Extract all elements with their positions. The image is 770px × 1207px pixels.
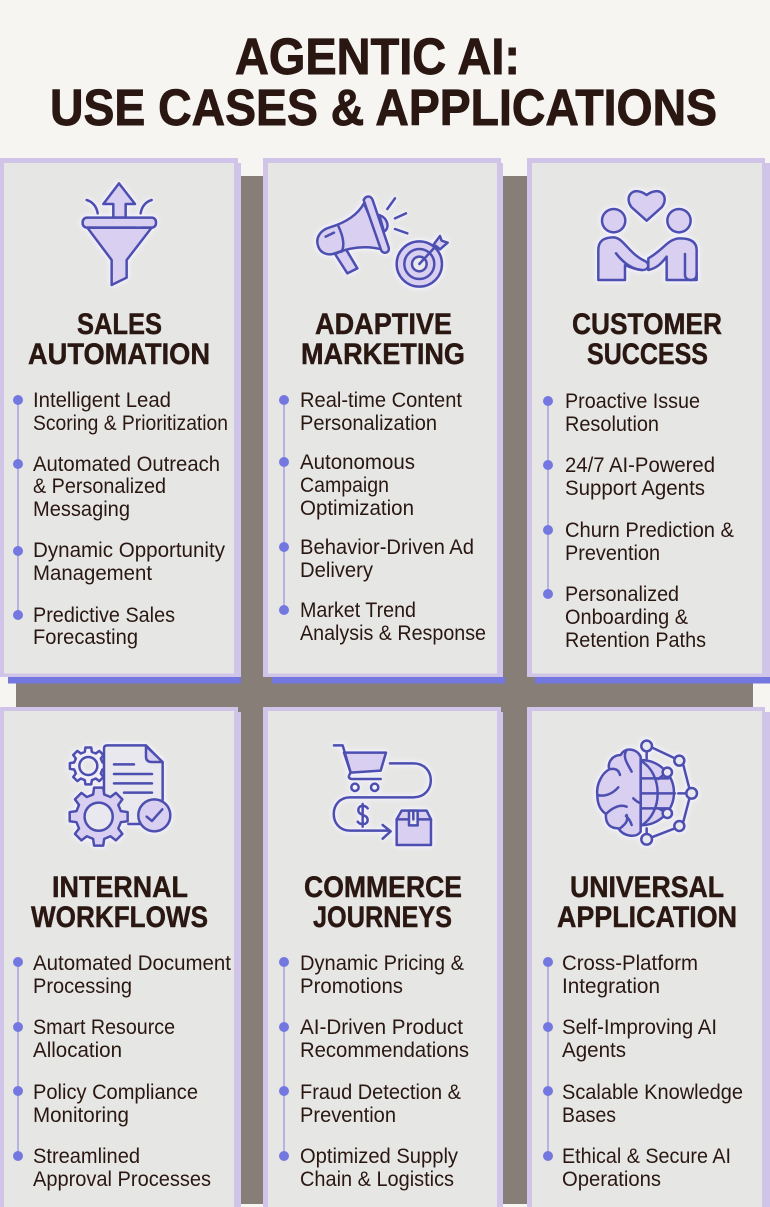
list: universal application items: Self-Improving AI [562,1016,717,1039]
list: internal workflows items: Automated Document [33,952,231,975]
list: sales automation items [13,389,228,649]
heading: universal application: APPLICATION [557,901,737,934]
panel: internal workflows [0,707,241,1207]
title [50,28,717,136]
heading: internal workflows [31,871,208,934]
list: sales automation items: & Personalized [33,475,166,498]
list: internal workflows items: Approval Processes [33,1168,211,1191]
heading: internal workflows: INTERNAL [52,871,188,904]
list: adaptive marketing items: Personalization [300,412,437,435]
heading: universal application: UNIVERSAL [570,871,724,904]
list: customer success items: Retention Paths [565,629,706,652]
panel: adaptive marketing [263,158,505,684]
icon: funnel with up arrow [83,183,156,285]
list: universal application items: Ethical & Secure AI [562,1145,731,1168]
list: commerce journeys items [279,952,469,1191]
icon: handshake with heart [598,191,697,280]
list: customer success items: Resolution [565,413,659,436]
list: sales automation items: Automated Outreach [33,453,220,476]
list: commerce journeys items: Recommendations [300,1039,469,1062]
heading: customer success: SUCCESS [587,338,708,371]
heading: internal workflows: WORKFLOWS [31,901,208,934]
list: commerce journeys items: Optimized Supply [300,1145,458,1168]
list: internal workflows items: Monitoring [33,1104,129,1127]
list: sales automation items: Scoring & Prioritization [33,412,228,435]
heading: customer success: CUSTOMER [572,308,722,341]
heading: adaptive marketing: MARKETING [301,338,465,371]
list: sales automation items: Forecasting [33,626,138,649]
list: adaptive marketing items [279,389,486,645]
list: universal application items [543,952,743,1191]
list: customer success items [543,390,734,652]
list: customer success items: Support Agents [565,477,705,500]
list: internal workflows items: Smart Resource [33,1016,175,1039]
list: adaptive marketing items: Optimization [300,497,414,520]
list: sales automation items: Predictive Sales [33,604,175,627]
list: universal application items: Cross-Platform [562,952,698,975]
list: customer success items: Proactive Issue [565,390,700,413]
list: universal application items: Bases [562,1104,616,1127]
heading: adaptive marketing [301,308,465,371]
list: commerce journeys items: Fraud Detection & [300,1081,461,1104]
list: commerce journeys items: Dynamic Pricing & [300,952,464,975]
heading: commerce journeys: COMMERCE [304,871,462,904]
list: adaptive marketing items: Autonomous [300,451,415,474]
list: adaptive marketing items: Campaign [300,474,389,497]
list: universal application items: Operations [562,1168,661,1191]
list: adaptive marketing items: Delivery [300,559,373,582]
heading: sales automation [28,308,210,371]
list: universal application items: Scalable Knowledge [562,1081,743,1104]
list: adaptive marketing items: Behavior-Driven Ad [300,536,474,559]
list: internal workflows items: Processing [33,975,132,998]
list: internal workflows items [13,952,231,1191]
list: adaptive marketing items: Real-time Content [300,389,462,412]
heading: commerce journeys: JOURNEYS [313,901,452,934]
heading: sales automation: AUTOMATION [28,338,210,371]
heading: commerce journeys [304,871,462,934]
list: sales automation items: Management [33,562,152,585]
panel: sales automation [0,158,241,684]
list: internal workflows items: Policy Compliance [33,1081,198,1104]
icon: megaphone and target [317,196,448,287]
list: customer success items: Prevention [565,542,660,565]
title: AGENTIC AI: [235,28,520,85]
heading: universal application [557,871,737,934]
list: sales automation items: Messaging [33,498,130,521]
heading: sales automation: SALES [77,308,162,341]
icon: cart, dollar and parcel journey [334,745,431,845]
icon: brain, globe and network [597,741,697,845]
panel: universal application [527,707,770,1207]
list: sales automation items: Dynamic Opportunity [33,539,225,562]
list: commerce journeys items: Prevention [300,1104,396,1127]
list: universal application items: Integration [562,975,660,998]
panel: customer success [527,158,770,684]
list: adaptive marketing items: Market Trend [300,599,416,622]
list: internal workflows items: Streamlined [33,1145,140,1168]
list: commerce journeys items: Promotions [300,975,403,998]
list: customer success items: Churn Prediction & [565,519,734,542]
title: USE CASES & APPLICATIONS [50,79,717,136]
list: commerce journeys items: Chain & Logistics [300,1168,454,1191]
list: customer success items: Personalized [565,583,679,606]
heading: adaptive marketing: ADAPTIVE [315,308,452,341]
list: sales automation items: Intelligent Lead [33,389,171,412]
list: customer success items: 24/7 AI-Powered [565,454,715,477]
icon: gears, document and check [70,745,170,846]
panel: commerce journeys [263,707,503,1207]
list: universal application items: Agents [562,1039,626,1062]
list: customer success items: Onboarding & [565,606,688,629]
list: internal workflows items: Allocation [33,1039,122,1062]
list: commerce journeys items: AI-Driven Product [300,1016,463,1039]
heading: customer success [572,308,722,371]
list: adaptive marketing items: Analysis & Response [300,622,486,645]
